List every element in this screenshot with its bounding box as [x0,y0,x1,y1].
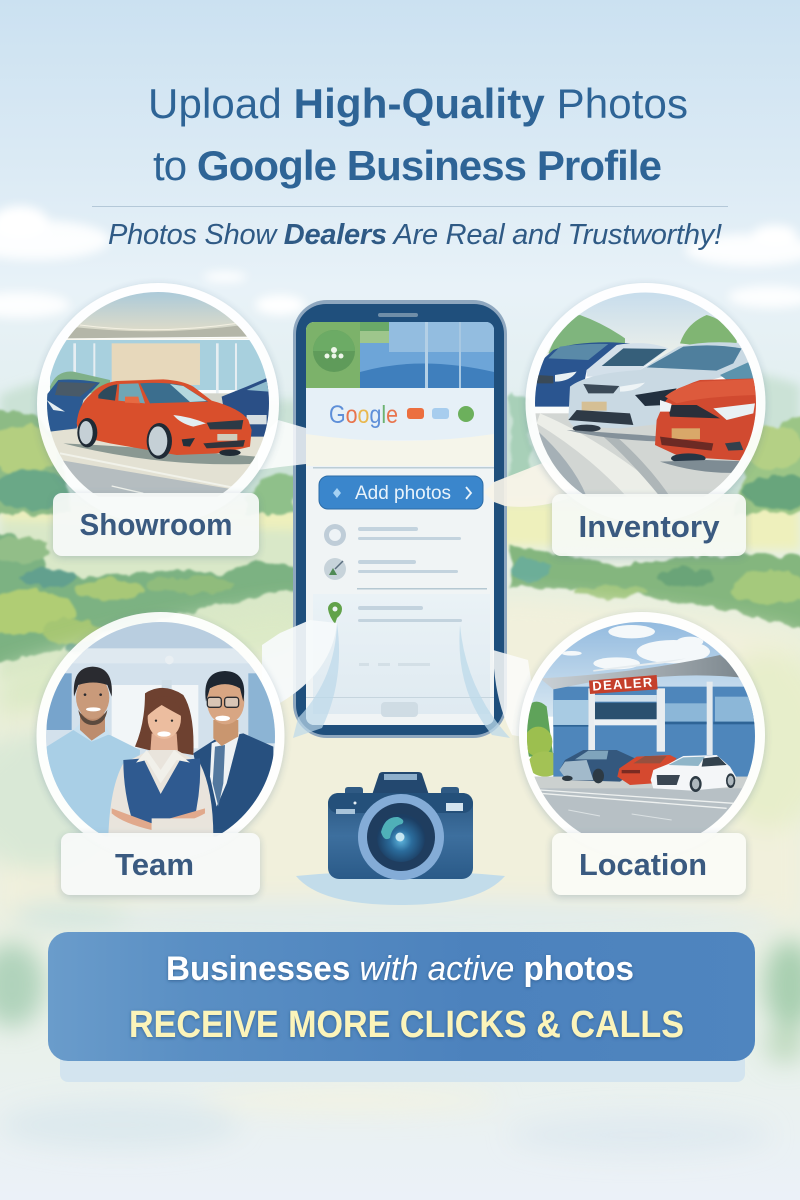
Google logo row [330,405,474,428]
label: showroom [53,493,259,556]
parked blue car [559,750,637,783]
label: team: Team [115,847,194,882]
title: to Google Business Profile [153,142,662,189]
label: showroom: Showroom [80,507,232,542]
right ridge [510,545,800,630]
red car [720,362,754,380]
parked red car [617,755,677,785]
showroom photo [47,292,269,493]
list row 2 [324,558,458,580]
shadow [63,443,257,464]
panel: team [33,612,288,836]
blue car right [222,377,270,437]
callout wedge: team to phone [262,620,337,712]
list row 3 with lower panel [306,594,494,717]
title: Upload High-Quality Photos [148,80,688,127]
team photo [46,622,275,836]
label: team [61,833,260,895]
callout banner: RECEIVE MORE CLICKS & CALLS [129,1004,684,1046]
location photo [527,622,755,833]
blue car [535,342,630,407]
callout banner [48,932,755,1082]
list row 1 [324,524,461,546]
upper right trees [735,415,800,514]
upper left trees [0,409,70,514]
label: inventory [552,494,746,556]
Google logo row: Google [329,401,398,429]
dealer sign: DEALER [592,674,653,694]
man right [193,671,273,837]
label: location: Location [579,847,707,882]
callout banner: Businesses with active photos [166,950,634,988]
callout film: location side [459,625,510,738]
parked white car [651,755,736,792]
callout wedge: inventory to phone [484,462,578,507]
subtitle: Photos Show Dealers Are Real and Trustworthy! [108,219,722,251]
camera shadow [296,871,505,905]
panel: location [516,610,768,833]
woman center [108,688,213,837]
callout wedge: showroom to phone [258,420,306,470]
man left [47,667,140,837]
phone mockup [293,300,507,738]
label: inventory: Inventory [578,509,720,544]
panel: inventory [522,282,768,494]
panel: showroom [34,282,282,493]
icon: camera [296,772,505,905]
blue car left [47,380,100,432]
callout wedge: location to phone [493,650,540,740]
second car [587,343,668,377]
map header [306,322,494,388]
title [148,80,688,189]
silver car [568,342,753,428]
inventory photo [535,292,756,494]
add photos button: Add photos [355,483,451,504]
callout film: team side [293,623,339,738]
add photos button [319,476,483,509]
lower left ridge [0,533,296,668]
phone screen [306,322,494,725]
label: location [552,833,746,895]
red car [77,379,252,455]
